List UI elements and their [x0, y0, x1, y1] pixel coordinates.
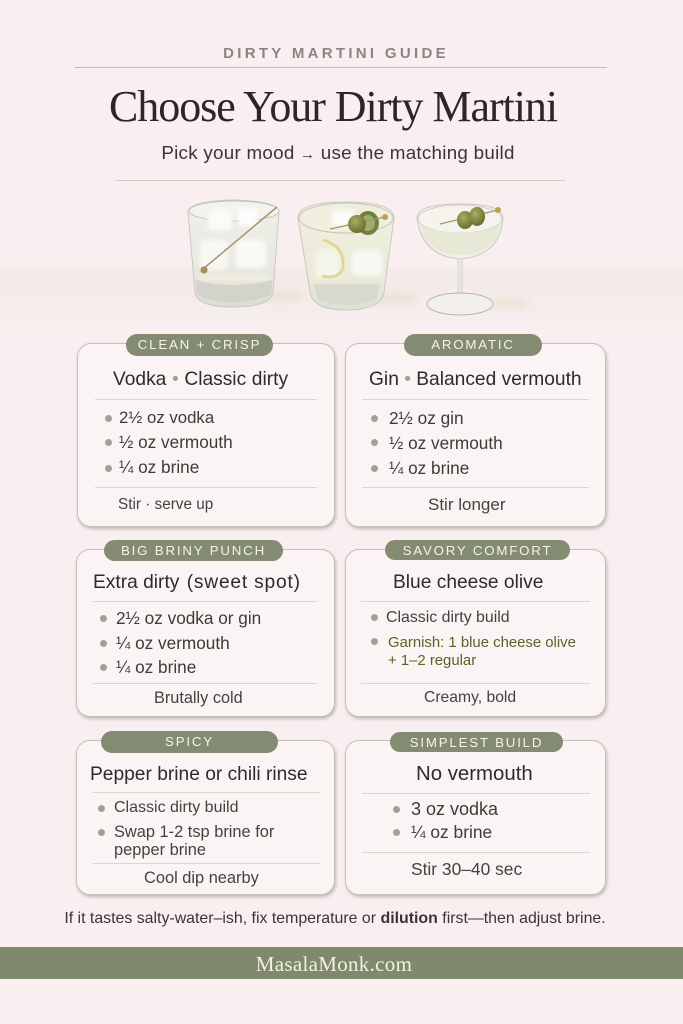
panel: savory comfort — [345, 549, 606, 717]
ingredients — [371, 408, 503, 478]
badge: simplest build: SIMPLEST BUILD — [410, 735, 543, 750]
ingredients: ½ oz vermouth — [389, 433, 503, 453]
heading: Gin • Balanced vermouth — [369, 369, 582, 390]
ingredients: 2½ oz vodka or gin — [116, 608, 261, 628]
ingredients: 3 oz vodka — [411, 799, 498, 819]
note: Stir · serve up — [118, 496, 213, 513]
ingredients: ¼ oz brine — [119, 457, 199, 477]
badge: savory comfort — [385, 540, 570, 560]
ingredients — [371, 609, 576, 669]
ingredients: Classic dirty build — [386, 609, 510, 626]
ingredients — [393, 799, 498, 842]
heading: Blue cheese olive — [393, 572, 543, 593]
note: Cool dip nearby — [144, 869, 259, 887]
badge: aromatic: AROMATIC — [431, 337, 515, 352]
ingredients: + 1–2 regular — [388, 653, 476, 669]
ingredients: Swap 1-2 tsp brine for — [114, 823, 274, 841]
panel: simplest build — [345, 740, 606, 895]
heading: Vodka • Classic dirty — [113, 369, 288, 390]
ingredients: ¼ oz brine — [116, 657, 196, 677]
glass: tumbler with lemon and olive — [298, 202, 419, 310]
heading: Pepper brine or chili rinse — [90, 764, 308, 785]
ingredients: Classic dirty build — [114, 799, 238, 816]
website: MasalaMonk.com — [256, 952, 412, 976]
badge: savory comfort: SAVORY COMFORT — [403, 543, 552, 558]
ingredients: 2½ oz gin — [389, 408, 464, 428]
ingredients — [100, 608, 261, 677]
footnote: If it tastes salty-water–ish, fix temperature or dilution first—then adjust brine. — [64, 910, 606, 927]
badge: clean + crisp — [126, 334, 273, 356]
title: Choose Your Dirty Martini — [109, 82, 557, 131]
badge: aromatic — [404, 334, 542, 356]
panel: clean + crisp — [77, 343, 335, 527]
glass: coupe with olives — [417, 204, 530, 315]
ingredients: Garnish: 1 blue cheese olive — [388, 635, 576, 651]
panel: spicy — [76, 740, 335, 895]
heading: Extra dirty (sweet spot) — [93, 572, 301, 593]
badge: spicy — [101, 731, 278, 753]
ingredients: ½ oz vermouth — [119, 432, 233, 452]
ingredients: ¼ oz vermouth — [116, 633, 230, 653]
note: Stir 30–40 sec — [411, 859, 522, 879]
ingredients: ¼ oz brine — [389, 458, 469, 478]
eyebrow label: DIRTY MARTINI GUIDE — [223, 45, 449, 62]
panel: aromatic — [345, 343, 606, 527]
badge: simplest build — [390, 732, 563, 752]
ingredients: ¼ oz brine — [411, 822, 492, 842]
note: Brutally cold — [154, 689, 243, 707]
badge: big briny punch: BIG BRINY PUNCH — [121, 543, 266, 558]
ingredients — [98, 799, 274, 859]
subtitle: Pick your mood → use the matching build — [161, 142, 515, 163]
note: Creamy, bold — [424, 689, 516, 706]
heading: No vermouth — [416, 763, 533, 785]
footer band — [0, 947, 683, 979]
ingredients: 2½ oz vodka — [119, 408, 214, 427]
ingredients: pepper brine — [114, 841, 206, 859]
badge: big briny punch — [104, 540, 283, 561]
glass: rocks glass with stirrer — [188, 200, 306, 307]
panel: big briny punch — [76, 549, 335, 717]
badge: clean + crisp: CLEAN + CRISP — [138, 337, 261, 352]
badge: spicy: SPICY — [165, 734, 214, 749]
ingredients — [105, 408, 233, 477]
note: Stir longer — [428, 495, 505, 514]
illustration: three cocktail glasses on a table — [0, 200, 683, 316]
